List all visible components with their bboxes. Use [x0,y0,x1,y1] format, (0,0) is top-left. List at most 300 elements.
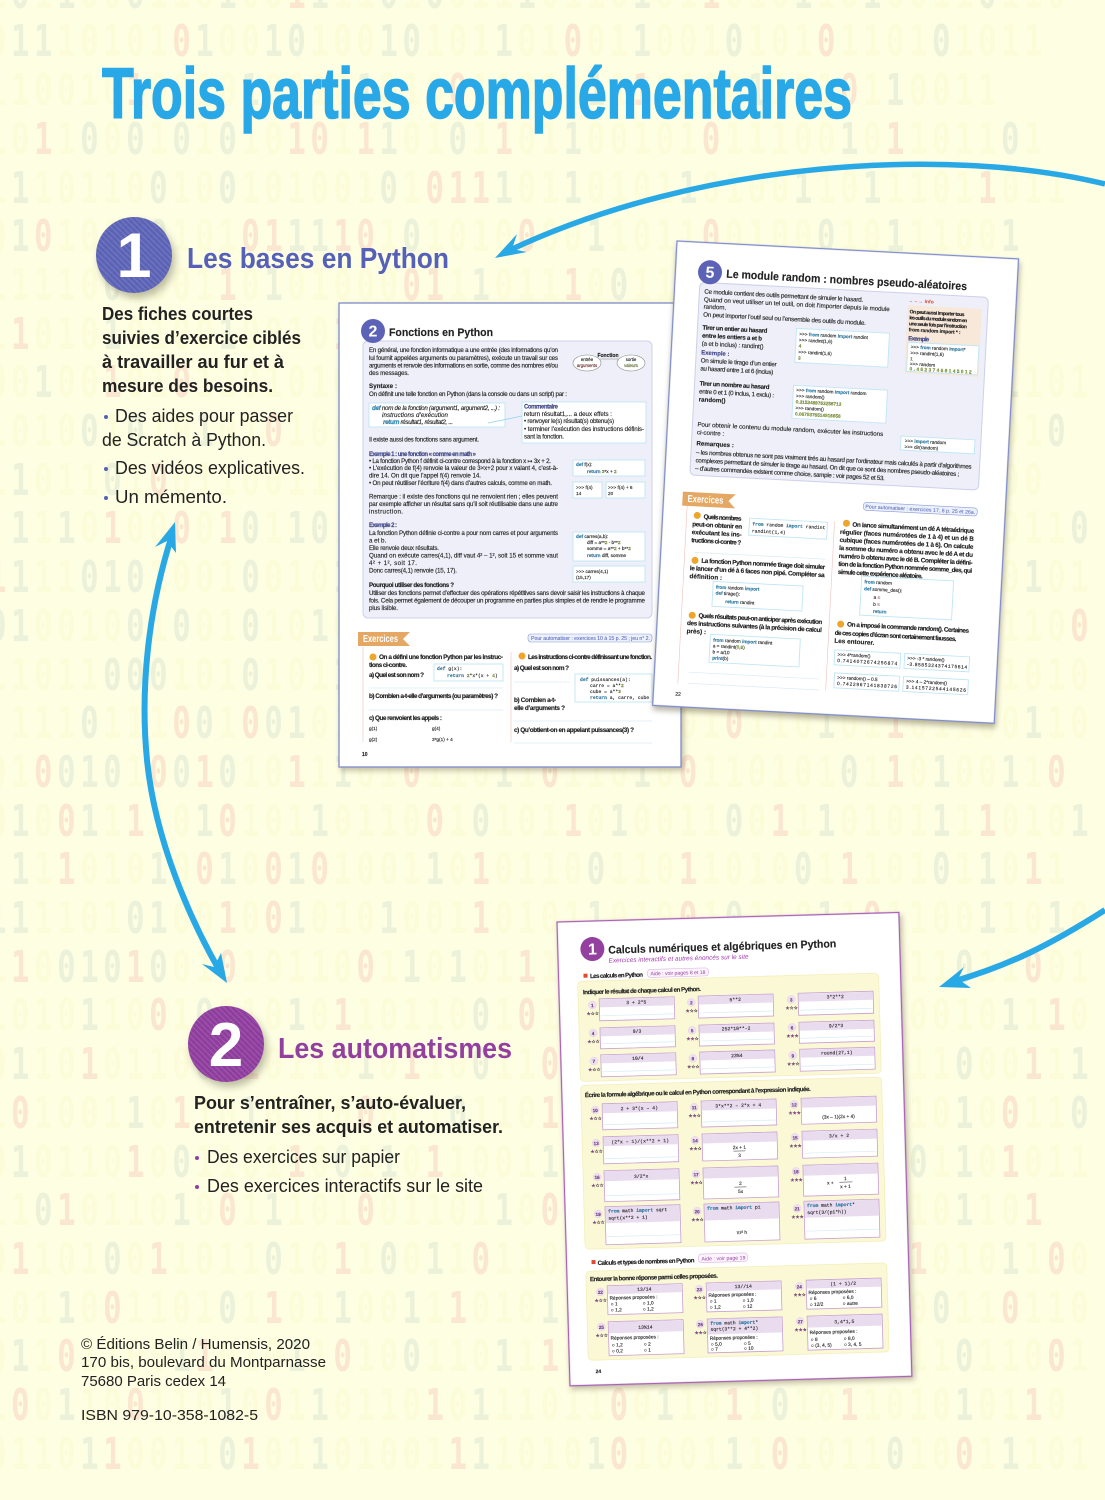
exercises left column: b) Combien a-t-elle d’arguments (ou paramètres) ? [369,693,498,700]
code: randint and random: >>> random() [795,405,824,412]
subsection heading: les calculs en Python: Aide : voir pages 8 et 18 [650,970,706,977]
code: randint and random: >>> random() [796,393,825,400]
callout: info note: from random import * : [908,327,961,336]
exercices banner [673,492,977,699]
page heading: fonctions en Python [361,319,652,618]
exercises left column: 3*g(1) + 4 [432,737,453,742]
list: exercices: Des exercices interactifs sur le site [207,1175,483,1196]
lesson text: On peut importer l’outil seul ou l’ensemble des outils du module. [703,311,866,327]
code: syntax [369,403,522,427]
page heading: fonctions en Python: Fonctions en Python [389,327,493,339]
code: randint and random: 0.0679376514916656 [795,411,841,419]
callout: info note: >>> random [910,361,935,368]
exercise group: QCM 22 to 27: Réponses proposées : [611,1334,659,1342]
code examples: return diff, somme [587,553,626,558]
subsection heading: calculs et types de nombres [591,1253,748,1267]
diagram: function input and output: entrée [581,357,594,362]
exercise group: QCM 22 to 27: ○ 3, 4, 5 [844,1342,862,1348]
credits: ISBN 979-10-358-1082-5 [81,1407,258,1424]
lesson text: Remarque : il existe des fonctions qui ne renvoient rien ; elles peuvent [369,494,558,500]
exercise group: QCM 22 to 27: ○ 7 [711,1347,718,1353]
exercise group: formules 10 to 21: 17 [693,1172,699,1177]
exercise group: QCM 22 to 27: ★★☆ [694,1330,707,1336]
exercise group: formules 10 to 21: 10 [593,1108,598,1113]
exercise group: QCM 22 to 27: ★☆☆ [693,1295,706,1301]
exercise group: formules 10 to 21: from math import sqrt [608,1207,667,1215]
exercise group: calculs 1 to 9: ★☆☆ [587,1011,599,1017]
section 2: les automatismes [188,1006,512,1196]
exercise group: QCM 22 to 27: ○ 1,0 [643,1300,654,1307]
exercise group: calculs 1 to 9: ★☆☆ [588,1067,601,1073]
exercise group: formules 10 to 21: (2*x – 1)/(x**2 + 1) [611,1138,669,1146]
code: randint and random: >>> dir(random) [904,444,939,451]
exercise group: formules 10 to 21: ★★★ [789,1143,802,1150]
lesson text: • On peut réutiliser l’écriture f(4) dans d’autres calculs, comme en math. [369,480,552,487]
lesson text: random. [703,303,727,312]
icon: number 1 badge [96,217,172,293]
lesson text: lui fournit appelées arguments ou paramètres), exécute un travail sur ces [369,355,558,362]
exercise group: calculs 1 to 9: round(27,1) [821,1050,853,1057]
lesson text: arguments et renvoie des informations en sortie, comme des nombres et/ou [369,362,559,370]
code examples: >>> f(4) + 6 [608,485,633,490]
exercises right column: Les entourer. [834,638,875,647]
exercises right column [514,652,652,743]
exercise group: calculs 1 to 9: 1 [591,1003,594,1008]
lesson text: ci-contre : [697,429,725,438]
exercise group: calculs 1 to 9: 2 [690,1000,693,1005]
list: aides: Des aides pour passer [115,405,293,426]
exercises left column [362,647,511,758]
exercices banner [358,632,652,646]
lesson text: Exemple 1 : une fonction « comme en math » [369,452,477,458]
exercises left column: c) Que renvoient les appels : [369,715,442,722]
panel: page 24 calculs numériques et algébriques [557,912,912,1386]
exercises left column: b = a/10 [712,649,730,655]
exercise group: QCM 22 to 27: 22 [598,1290,603,1295]
exercise group: QCM 22 to 27: ○ 1 [611,1301,618,1308]
exercises left column: 10 [362,752,368,758]
lesson text: – les nombres obtenus ne sont pas vraiment tirés au hasard par l’ordinateur mais calculés à partir d’algorithmes [696,449,972,471]
lesson text: Tirer un nombre au hasard [699,380,770,391]
exercises left column: On a défini une fonction Python par les instruc- [379,654,503,661]
exercises left column: exécutant les ins- [692,529,742,539]
callout: info note [904,298,982,377]
exercise group: QCM 22 to 27: ○ 2 [644,1342,651,1348]
list: aides [102,405,305,507]
page heading: 1 [588,941,597,959]
subsection heading: les calculs en Python: Les calculs en Python [590,972,643,980]
exercises right column: from random [864,579,892,586]
exercise group: formules 10 to 21: ★☆☆ [589,1116,602,1122]
callout: info note: On peut aussi importer tous [909,309,965,318]
credits: 170 bis, boulevard du Montparnasse [81,1354,326,1371]
exercises right column: régulier (faces numérotées de 1 à 4) et un dé B [840,529,974,543]
code: randint and random: 4 [799,344,802,349]
exercises left column: peut-on obtenir en [692,521,742,531]
exercises right column: b) Combien a-t- [514,697,556,704]
exercise group: QCM 22 to 27: ○ 12 [743,1304,753,1310]
exercise group: calculs 1 to 9: 9 [791,1053,795,1059]
exercise group: formules 10 to 21: 21 [794,1206,800,1211]
lesson text: entre 0 et 1 (0 inclus, 1 exclu) : [699,388,774,399]
code: randint and random: >>> from random import random [796,387,867,396]
exercise group: QCM 22 to 27: 3,4*1,5 [834,1319,855,1325]
exercises left column: g(1) [369,726,378,731]
callout: commentaire: return résultat1,... a deux effets : [524,411,612,418]
exercises left column: 22 [675,692,681,698]
exercises right column [832,519,976,695]
arrow: right to exercise page [939,910,1105,988]
exercises left column: Quels nombres [703,514,742,523]
exercises left column: from random import randint [752,521,826,531]
code examples: def carres(a,b): [576,534,608,539]
exercise group: calculs 1 to 9: 9/2*3 [829,1023,843,1029]
exercise group: formules 10 to 21: 1 [844,1176,847,1182]
exercise group: calculs 1 to 9: 3 [790,997,793,1003]
exercises left column: a) Quel est son nom ? [369,672,424,679]
callout: commentaire: sant la fonction. [524,434,564,440]
exercise group: calculs 1 to 9: ★☆☆ [587,1039,600,1045]
callout: info note: 0.46237468145912 [909,366,972,375]
text block: description: suivies d’exercice ciblés [102,328,301,348]
diagram: function input and output: valeurs [624,363,638,368]
exercises right column: cube = a**3 [590,689,621,695]
exercise group: calculs 1 to 9: 9/3 [633,1029,642,1035]
lesson text: • La fonction Python f définit ci-contre correspond à la fonction x ↦ 3x + 2. [369,458,551,465]
exercise group: calculs 1 to 9: Indiquer le résultat de chaque calcul en Python. [583,986,701,996]
exercises left column: print(b) [712,655,729,661]
panel: page 10 fonctions en Python [339,303,681,767]
lesson text: complexes permettant de simuler le tirage au hasard. On dit que ce sont des nombres pseudo-aléatoires ; [695,457,960,478]
heading: les bases en Python: Les bases en Python [187,243,449,275]
exercise group: calculs 1 to 9: ★★☆ [787,1061,800,1068]
exercises left column: from random import randint [713,637,773,646]
page heading: le module random: 5 [705,265,715,282]
exercise group: formules 10 to 21: 3/x + 2 [829,1133,849,1139]
diagram: function input and output: arguments [577,363,597,368]
exercise group: formules 10 to 21: ★★☆ [689,1146,702,1152]
exercise group: formules 10 to 21: from math import pi [707,1204,761,1212]
lesson text: Quand on exécute carres(4,1), diff vaut 4² – 1², soit 15 et somme vaut [369,552,558,560]
exercise group: formules 10 to 21: 2 [739,1181,742,1187]
code: randint and random: 3 [798,355,801,361]
lesson text: On simule le tirage d’un entier [701,357,777,368]
exercises right column: >>> 4*random() [837,652,871,659]
credits [81,1336,326,1424]
credits: 75680 Paris cedex 14 [81,1373,226,1390]
exercise group: calculs 1 to 9: 5**2 [729,997,741,1003]
exercise group: QCM 22 to 27: ○ 8 [811,1337,818,1343]
lesson text: – d’autres commandes existent comme choice, sample : voir pages 52 et 53. [695,465,885,482]
list: exercices: Des exercices sur papier [207,1146,400,1167]
code examples: diff = a**2 - b**2 [587,540,621,545]
text block: description: Des fiches courtes [102,304,253,324]
exercises right column: return [873,609,887,614]
exercise group: formules 10 to 21: 18 [793,1169,799,1174]
text block: description: à travailler au fur et à [102,352,285,372]
code examples: >>> f(4) [576,485,593,490]
exercise group: QCM 22 to 27: ○ 1,2 [710,1305,721,1311]
list: aides: de Scratch à Python. [102,429,266,450]
exercise group: formules 10 to 21: 12 [792,1102,797,1108]
code: randint and random: >>> randint(1,6) [799,338,833,344]
code examples: return 3*x + 2 [587,469,617,474]
callout: info note: une seule fois par l’instruction [909,321,967,330]
text block: description: Pour s’entraîner, s’auto-évaluer, [194,1093,466,1113]
exercises right column: a = [873,595,881,600]
exercise group: QCM 22 to 27: ○ 1 [644,1348,651,1354]
icon: number 2 badge: 2 [209,1011,243,1080]
exercises left column: def g(x): [437,666,462,672]
callout: commentaire [522,402,646,443]
exercise group: formules 10 to 21: ★☆☆ [592,1220,605,1226]
exercise group: QCM 22 to 27: Réponses proposées : [708,1292,757,1299]
exercise group: formules 10 to 21: 13 [594,1141,599,1146]
lesson text: Pour obtenir le contenu du module random, exécuter les instructions [697,421,883,438]
exercise group: formules 10 to 21: sqrt(3/(pi*h)) [807,1209,847,1216]
lesson text: On définit une telle fonction en Python (dans la console ou dans un script) par : [369,391,567,398]
exercise group: QCM 22 to 27: 25 [599,1325,604,1330]
diagram: function input and output [573,353,645,371]
exercise group: QCM 22 to 27: ○ autre [843,1301,858,1307]
exercise group: QCM 22 to 27: ★☆☆ [595,1298,607,1304]
exercise group: formules 10 to 21: from math import* [807,1202,855,1209]
exercise group: formules 10 to 21: 20 [695,1209,700,1214]
exercises left column: return randint [725,599,755,606]
exercise group: formules 10 to 21: 14 [693,1138,698,1143]
exercise group: QCM 22 to 27: ○ 8,0 [844,1336,855,1342]
list: exercices [195,1146,483,1196]
exercise group: formules 10 to 21: ★★★ [791,1214,804,1221]
exercise group: QCM 22 to 27: Entourer la bonne réponse parmi celles proposées. [590,1273,718,1283]
exercise group: formules 10 to 21: ★★☆ [691,1217,704,1223]
exercise group: formules 10 to 21: x + [827,1181,834,1187]
exercise group: QCM 22 to 27: ○ 6,0 [843,1295,854,1301]
exercises right column: c) Qu’obtient-on en appelant puissances(3) ? [514,727,634,734]
panel: page 22 le module random [653,241,1019,723]
exercise group: calculs 1 to 9: 8 [692,1056,695,1061]
code examples: 20 [608,491,614,496]
exercise group: formules 10 to 21: 3*x**2 – 2*x + 4 [715,1102,761,1110]
section 1: les bases en Python [96,217,449,507]
exercise group: formules 10 to 21: ★★★ [788,1110,801,1117]
exercise group: calculs 1 to 9: 23%4 [731,1053,743,1059]
arrow: double-headed between sections 1 and 2 [145,522,227,983]
exercise group: QCM 22 to 27: Réponses proposées : [808,1289,857,1296]
exercises right column: Les instructions ci-contre définissant une fonction. [528,654,652,661]
exercise group: QCM 22 to 27: ○ 0,2 [612,1348,623,1355]
exercise group: formules 10 to 21: ★★☆ [690,1180,703,1186]
exercise group: QCM 22 to 27: 24 [797,1284,802,1289]
exercise group: formules 10 to 21: πr² h [736,1230,747,1236]
exercise group: formules 10 to 21: ★☆☆ [590,1149,603,1155]
exercise group: formules 10 to 21: ★★★ [790,1177,803,1184]
exercise group: formules 10 to 21: 2x + 1 [733,1145,746,1151]
code: randint and random: >>> import random [905,438,946,445]
exercise group: QCM 22 to 27: ○ (3, 4, 5) [811,1342,832,1349]
exercise group: QCM 22 to 27: 27 [798,1319,803,1324]
exercise group: formules 10 to 21: x + 1 [840,1184,851,1190]
page heading: fonctions en Python: 2 [369,324,378,340]
exercise group: formules 10 to 21: Écrire la formule algébrique ou le calcul en Python correspondant à l’expression indiquée. [585,1085,811,1099]
exercise group: formules 10 to 21: ★★☆ [688,1113,701,1119]
code: randint and random [791,328,980,454]
exercise group: QCM 22 to 27: (1 + 1)/2 [830,1281,856,1288]
exercise group: formules 10 to 21 [581,1077,886,1249]
exercises left column: a = randint(0,6) [713,643,745,650]
lesson text: fois. Cela permet également de découper un programme en parties plus simples et de rendre le programme [369,598,646,605]
exercise group: QCM 22 to 27: ○ 5 [744,1341,751,1347]
lesson text [369,347,646,612]
exercise group: QCM 22 to 27: sqrt(3**2 + 4**2) [710,1326,759,1333]
exercises left column: def tirage(): [715,591,740,597]
exercise group: formules 10 to 21: 19 [596,1212,601,1217]
lesson text: des messages. [369,370,409,377]
page heading: le module random: Le module random : nombres pseudo-aléatoires [726,269,967,293]
lesson text: La fonction Python définie ci-contre a pour nom carres et pour arguments [369,530,558,537]
code examples: somme = a**2 + b**2 [587,546,631,551]
diagram: function input and output: sortie [626,357,637,362]
exercise group: QCM 22 to 27: 26 [698,1322,703,1327]
lesson text: a et b. [369,538,386,545]
exercise group: QCM 22 to 27: ○ 12/2 [810,1302,824,1308]
diagram: function input and output: Fonction [597,353,619,359]
exercises right column: tion de la fonction Python nommée somme_des, qui [838,561,973,575]
heading: les automatismes: Les automatismes [278,1033,512,1065]
arrow: top right to section 1 [495,164,1105,258]
exercises right column: de ces copies d’écran sont certainement fausses. [835,630,957,643]
callout: info note: >>> from random import* [911,344,966,352]
exercise group: QCM 22 to 27: ○ 1,2 [611,1307,622,1314]
exercises right column: def somme_des(): [864,586,902,593]
lesson text: random() [699,396,726,405]
lesson text: par exemple afficher un résultat sans qu’il soit réutilisable dans une autre [369,501,559,508]
exercise group: calculs 1 to 9: 3 + 2*5 [626,1000,647,1006]
subsection heading: les calculs en Python [583,968,709,980]
exercises right column: >>> -3 * random() [907,656,945,663]
code: randint and random: >>> randint(1,6) [798,350,832,356]
exercices banner: Exercices [363,634,398,645]
exercises left column: La fonction Python nommée tirage doit simuler [701,558,826,571]
lesson text: • L’exécution de f(4) renvoie la valeur de 3×x+2 pour x valant 4, c’est-à- [369,465,558,472]
exercise group: formules 10 to 21: 5x [738,1189,744,1195]
text block: description [102,304,301,396]
exercises left column [675,511,828,705]
exercise group: calculs 1 to 9: ★☆☆ [687,1064,700,1070]
exercises left column: tions ci-contre. [369,662,407,669]
text block: description [194,1093,503,1137]
lesson text: entre les entiers a et b [702,332,762,343]
exercise group: QCM 22 to 27: ★★★ [794,1327,807,1334]
exercise group: QCM 22 to 27: ○ 1,2 [643,1306,654,1313]
exercices banner: Exercices [687,494,724,507]
code examples [573,460,645,582]
exercises left column: randint(1,4) [752,528,786,536]
callout: info note: Exemple [908,336,930,343]
exercices banner: Pour automatiser : exercices 17, 8 p. 25 et 26a. [865,504,975,516]
lesson text: Remarques : [696,440,734,449]
exercises left column: Quels résultats peut-on anticiper après exécution [698,613,823,626]
exercise group: formules 10 to 21: 2 + 3*(x – 4) [620,1105,658,1112]
code: syntax: instructions d’exécution [382,412,449,419]
lesson text: Donc carres(4,1) renvoie (15, 17). [369,568,457,575]
exercise group: QCM 22 to 27: ○ 5,0 [711,1342,722,1348]
exercise group: QCM 22 to 27: 23 [697,1287,702,1292]
icon: number 2 badge [188,1006,264,1082]
exercise group: QCM 22 to 27: Réponses proposées : [710,1335,758,1342]
exercise group: calculs 1 to 9: ★★★ [786,1033,799,1040]
callout: commentaire: Commentaire [524,404,559,410]
exercise group: calculs 1 to 9: 4 [592,1031,595,1036]
code examples: 14 [576,491,582,496]
exercises right column: cubique (faces numérotées de 1 à 6). On calcule [839,537,974,551]
lesson text: Pourquoi utiliser des fonctions ? [369,582,454,589]
code examples: def f(x): [576,462,592,467]
exercises right column: simule cette expérience aléatoire. [838,569,923,580]
lesson text: Exemple : [701,350,730,358]
exercises left column: le lancer d’un dé à 6 faces non pipé. Compléter sa [690,565,825,579]
subsection heading: calculs et types de nombres: Aide : voir page 19 [701,1255,746,1263]
callout: info note: →→→ Info [908,298,934,306]
text block: description: mesure des besoins. [102,376,273,396]
callout: info note: 1 [910,356,913,362]
exercices banner: Pour automatiser : exercices 10 à 15 p. 25 ; jeu n° 2. [531,636,650,642]
exercises right column: elle d’arguments ? [514,705,565,712]
lesson text: Ce module contient des outils permettant de simuler le hasard. [704,289,864,304]
exercise group: calculs 1 to 9: 7 [593,1059,596,1064]
page heading: Calculs numériques et algébriques en Python [608,938,837,957]
code examples: >>> carres(4,1) [576,569,609,574]
exercise group: QCM 22 to 27: ○ 10 [744,1346,754,1352]
exercise group: QCM 22 to 27: 13//14 [735,1284,752,1290]
lesson text: En général, une fonction informatique a une entrée (des informations qu’on [369,347,559,354]
exercise group: QCM 22 to 27: Réponses proposées : [609,1294,658,1302]
code: syntax: def nom de la fonction (argument1, argument2, ...) : [372,405,500,412]
exercises right column: 3.1415722544145626 [906,685,966,693]
exercise group: QCM 22 to 27: from math import* [710,1320,758,1327]
exercises right column: >>> 4 – 2*random() [906,679,948,686]
lesson text: (a et b inclus) : randint() [701,340,764,351]
title: Trois parties complémentaires [102,55,852,134]
callout: info note: >>> randint(1,6) [910,350,944,357]
exercises left column: définition : [689,573,722,582]
exercise group: QCM 22 to 27: ○ 1,2 [612,1342,623,1349]
lesson text: Il existe aussi des fonctions sans argument. [369,436,479,444]
callout: commentaire: • terminer l’exécution des instructions définis- [524,426,644,433]
exercises right column: 0.7422967141838726 [837,681,898,689]
list: aides: Des vidéos explicatives. [115,457,305,478]
exercise group: QCM 22 to 27: ○ 6 [810,1296,817,1302]
exercises left column: from random import [716,585,760,592]
exercise group: calculs 1 to 9: 252*10**-2 [722,1026,751,1032]
subsection heading: calculs et types de nombres: Calculs et types de nombres en Python [597,1257,695,1267]
exercise group: formules 10 to 21: 16 [595,1175,600,1180]
lesson text: plus lisible. [369,605,398,612]
lesson text [695,289,980,487]
lesson text: instruction. [369,508,403,516]
page heading: Exercices interactifs et autres énoncés sur le site [609,954,749,965]
exercise group: QCM 22 to 27 [586,1263,889,1360]
callout: info note: les outils du module random en [909,315,967,324]
exercises right column: def puissances(a): [580,677,631,683]
exercises right column: On lance simultanément un dé A tétraédrique [852,522,975,535]
exercises right column: On a imposé la commande random(). Certaines [847,621,970,635]
exercises left column: g(4) [432,726,441,731]
exercises right column: >>> random() – 0.5 [837,675,878,682]
exercise group: QCM 22 to 27: ○ 1 [710,1299,717,1305]
exercise group: QCM 22 to 27: ★☆☆ [595,1333,608,1339]
exercise group: QCM 22 to 27: Réponses proposées : [809,1329,858,1336]
